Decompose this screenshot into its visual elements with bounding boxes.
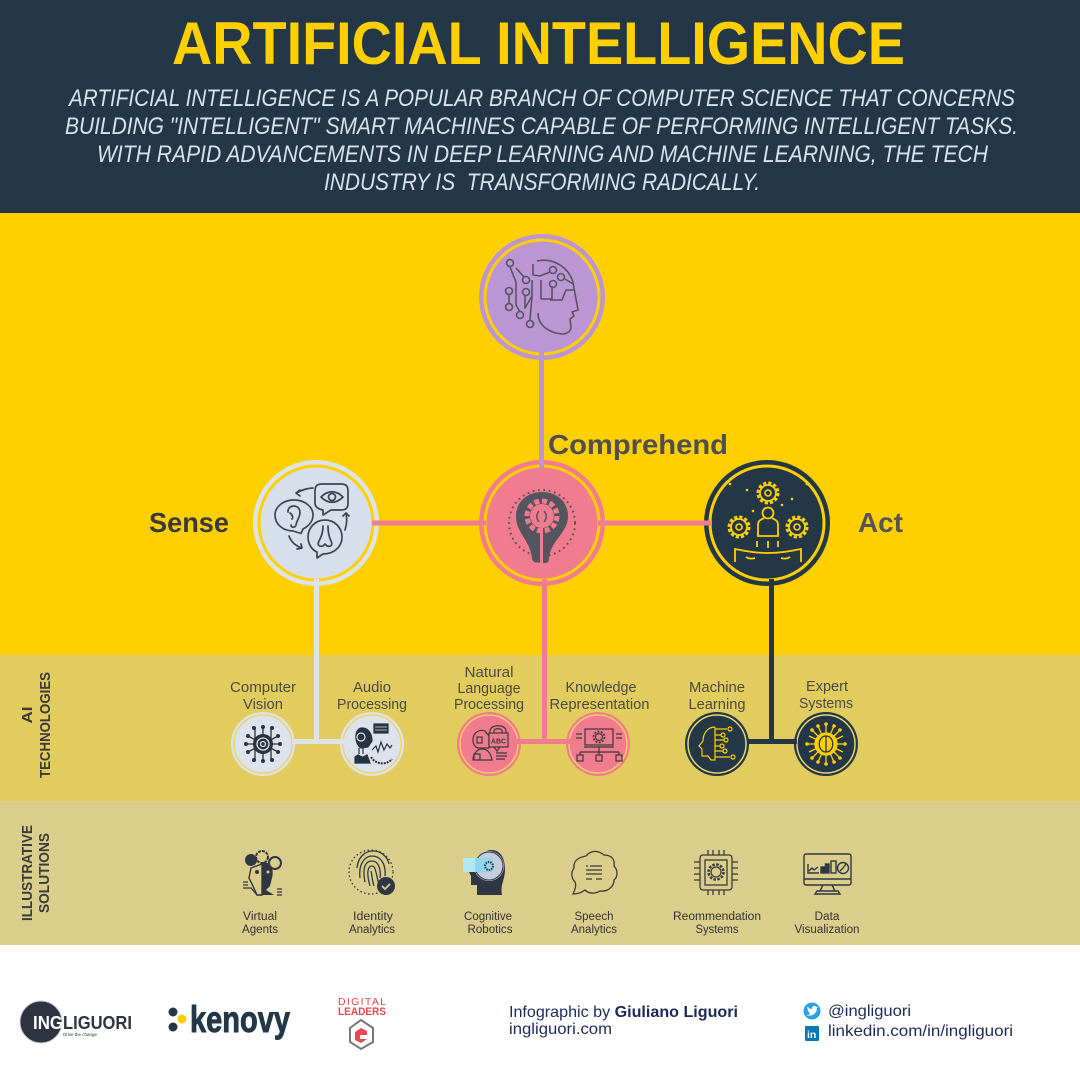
technology: Computer Vision: Computer: [230, 680, 296, 696]
technology: Knowledge Representation: Knowledge: [566, 680, 636, 696]
credit text: [509, 1004, 738, 1038]
solution: Cognitive Robotics: Cognitive: [464, 911, 512, 923]
social: twitter handle: @ingliguori: [828, 1003, 911, 1020]
icon: monitor with charts: [804, 854, 851, 894]
solution: Speech Analytics: [571, 851, 617, 936]
title: ARTIFICIAL INTELLIGENCE: [172, 10, 905, 77]
solution: Identity Analytics: Analytics: [349, 924, 395, 936]
icon: speech bubble: [572, 851, 617, 894]
header panel: [0, 0, 1080, 213]
technology: Audio Processing: Processing: [337, 697, 407, 713]
icon: learning head: [699, 727, 735, 760]
connector: comprehend vertical line: [542, 579, 547, 744]
logo: Kenovy: kenovy: [190, 999, 290, 1040]
icon: linkedin: [805, 1026, 819, 1041]
label: illustrative solutions: ILLUSTRATIVE: [20, 825, 36, 921]
technology: Natural Language Processing: Processing: [454, 697, 524, 713]
connector: act horizontal line: [747, 739, 797, 744]
technology: Machine Learning: [685, 680, 749, 776]
icon: audio robot head: [355, 724, 392, 763]
label: AI technologies: TECHNOLOGIES: [38, 672, 54, 778]
logo: Ingliguori: Drive the change: [63, 1032, 97, 1037]
solution: Recommendation Systems: [673, 850, 761, 936]
icon: person with gears: [729, 483, 808, 562]
icon: language robot: [473, 726, 508, 760]
connector: pink line comprehend to act: [598, 520, 712, 526]
label: illustrative solutions: SOLUTIONS: [37, 833, 53, 913]
heading: Act: Act: [858, 507, 903, 538]
panel: AI technologies band: [0, 655, 1080, 801]
icon: digital eye: [244, 725, 282, 763]
technology: Machine Learning: Learning: [688, 697, 746, 713]
intro paragraph: INDUSTRY IS TRANSFORMING RADICALLY.: [324, 169, 760, 196]
technology: Natural Language Processing: [454, 665, 524, 776]
icon: robot head with screen: [463, 850, 505, 895]
panel: yellow diagram background: [0, 213, 1080, 655]
technology: Natural Language Processing: Language: [458, 681, 520, 697]
technology: Expert Systems: [794, 679, 858, 776]
solution: Recommendation Systems: Reommendation: [673, 911, 761, 923]
node: act: [704, 460, 830, 586]
panel: illustrative solutions band: [0, 801, 1080, 945]
label: AI technologies: [20, 672, 54, 778]
solution: Speech Analytics: Analytics: [571, 924, 617, 936]
connector: purple line from head to comprehend: [539, 352, 544, 468]
heading: Sense: Sense: [149, 507, 229, 538]
icon: twitter: [804, 1002, 820, 1020]
icon: linkedin: in: [807, 1029, 816, 1041]
label: illustrative solutions: [20, 825, 53, 921]
logo: Ingliguori: LIGUORI: [63, 1012, 132, 1033]
icon: light bulb with gear: [509, 490, 575, 563]
logo: Ingliguori: [20, 1001, 132, 1043]
icon: virtual agent: [243, 851, 282, 895]
credit text: Infographic by Giuliano Liguori: [509, 1004, 738, 1021]
icon: processor chip: [694, 850, 738, 895]
node: AI head (purple): [479, 234, 605, 360]
node: sense: [253, 460, 379, 586]
solution: Data Visualization: [794, 854, 860, 936]
connector: sense vertical line: [314, 579, 319, 744]
icon: senses speech bubbles: [275, 484, 349, 558]
solution: Virtual Agents: [242, 851, 282, 936]
heading: Comprehend: Comprehend: [548, 429, 728, 460]
credit text: ingliguori.com: [509, 1021, 612, 1038]
technology: Machine Learning: Machine: [689, 680, 745, 696]
solution: Identity Analytics: Identity: [353, 911, 393, 923]
technology: Knowledge Representation: Representation: [550, 697, 650, 713]
technology: Natural Language Processing: ABC: [491, 738, 506, 746]
technology: Computer Vision: [230, 680, 296, 776]
logo: Digital Leaders: DIGITAL: [338, 996, 386, 1008]
technology: Computer Vision: Vision: [243, 697, 283, 713]
solution: Virtual Agents: Agents: [242, 924, 278, 936]
social: linkedin url: linkedin.com/in/ingliguori: [828, 1023, 1013, 1040]
technology: Expert Systems: Expert: [806, 679, 848, 695]
connector: pink line sense to comprehend: [372, 520, 486, 526]
logo: Ingliguori: ING: [33, 1012, 63, 1033]
technology: Audio Processing: [337, 680, 407, 776]
solution: Cognitive Robotics: Robotics: [468, 924, 513, 936]
technology: Natural Language Processing: Natural: [464, 665, 514, 681]
intro paragraph: [65, 85, 1018, 196]
node: comprehend: [479, 460, 605, 586]
solution: Data Visualization: Data: [814, 911, 840, 923]
technology: Expert Systems: Systems: [799, 696, 853, 712]
solution: Virtual Agents: Virtual: [243, 911, 277, 923]
panel: footer: [0, 945, 1080, 1080]
connector: act vertical line: [769, 579, 774, 744]
icon: expert brain chip: [805, 722, 847, 766]
solution: Data Visualization: Visualization: [794, 924, 860, 936]
solution: Recommendation Systems: Systems: [696, 924, 739, 936]
connector: comprehend horizontal line: [517, 739, 572, 744]
solution: Cognitive Robotics: [463, 850, 513, 936]
solution: Speech Analytics: Speech: [574, 911, 614, 923]
solution: Identity Analytics: [349, 850, 395, 936]
icon: fingerprint: [349, 850, 395, 895]
label: AI technologies: AI: [20, 706, 36, 724]
technology: Audio Processing: Audio: [353, 680, 391, 696]
logo: Kenovy: [168, 999, 290, 1040]
connector: sense horizontal line: [292, 739, 344, 744]
logo: Digital Leaders: LEADERS: [338, 1006, 386, 1018]
technology: Knowledge Representation: [550, 680, 650, 776]
icon: knowledge tree: [576, 729, 622, 761]
icon: circuit head: [506, 260, 578, 334]
logo: Digital Leaders: [338, 996, 386, 1049]
